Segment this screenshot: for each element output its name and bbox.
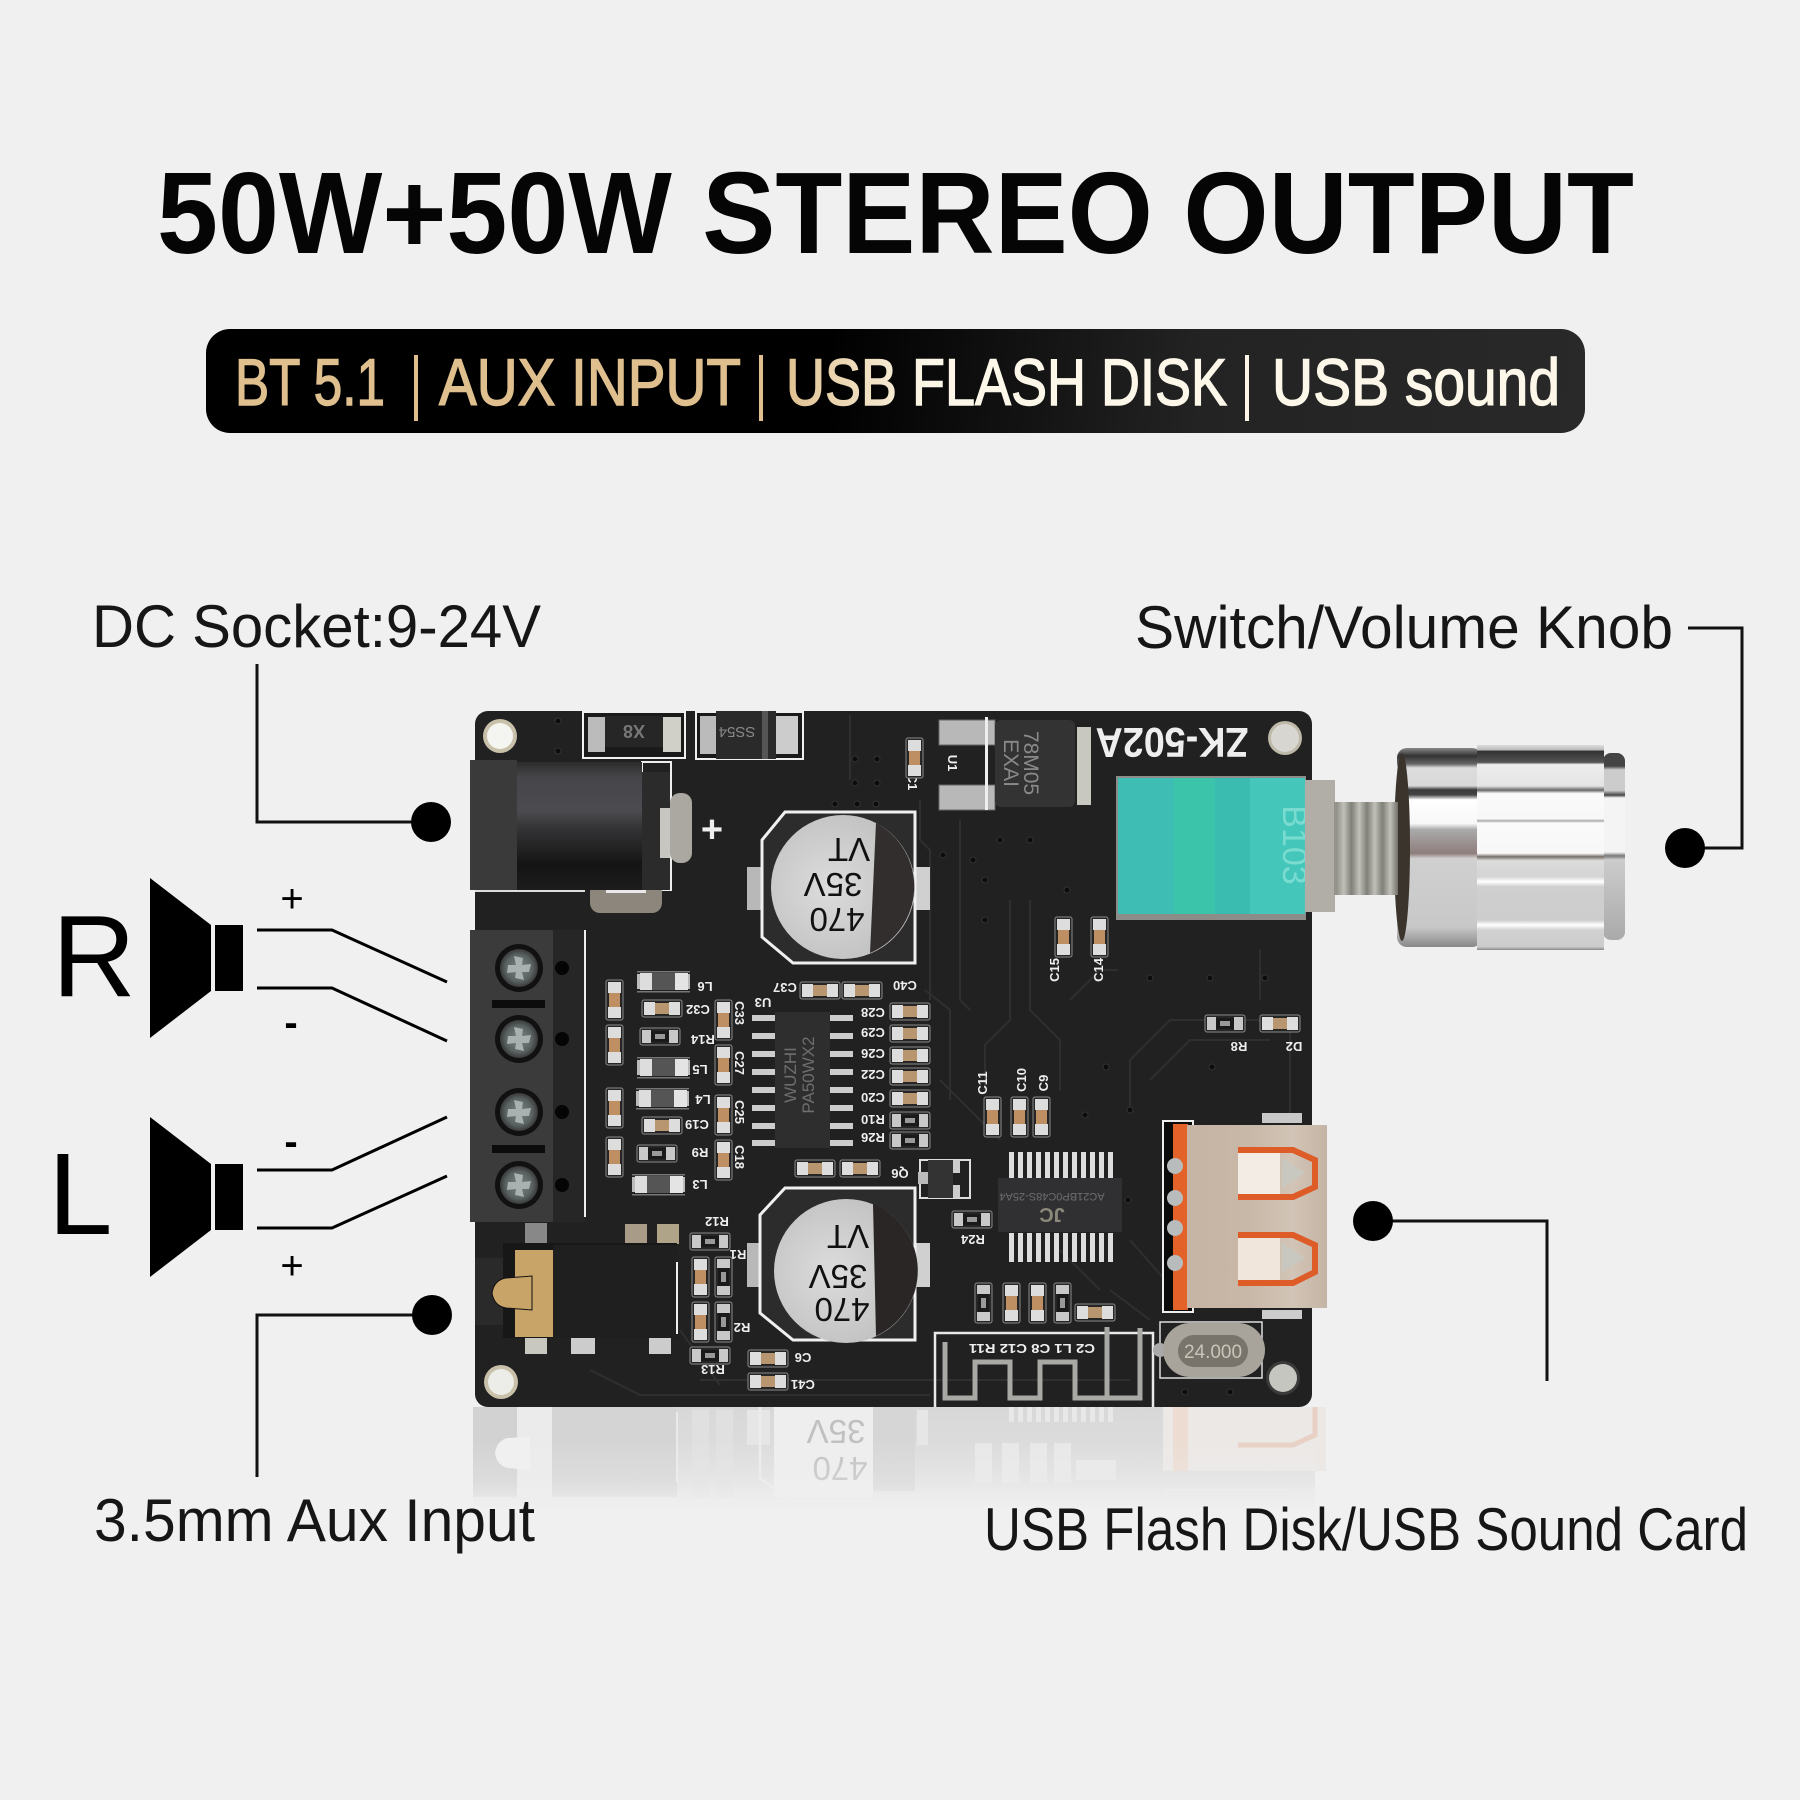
silkscreen labels: D2 — [1286, 1039, 1302, 1054]
silkscreen labels: C18 — [732, 1145, 747, 1169]
electrolytic capacitor bottom — [747, 1188, 930, 1343]
callout: USB port — [1353, 1201, 1547, 1381]
mounting holes — [483, 719, 1302, 1399]
electrolytic capacitor bottom: VT — [827, 1218, 869, 1255]
label: DC socket: DC Socket:9-24V — [92, 593, 541, 660]
silkscreen labels: C1 — [905, 774, 920, 790]
amplifier chip PA50WX2: WUZHI — [781, 1047, 800, 1103]
electrolytic capacitor top: 470 — [809, 901, 865, 938]
silkscreen labels: C41 — [791, 1377, 815, 1392]
board reflection — [473, 1407, 1326, 1512]
silkscreen labels: R24 — [960, 1232, 985, 1247]
silkscreen labels: C15 — [1047, 958, 1062, 982]
feature pill banner: USB sound — [1272, 345, 1560, 419]
right channel speaker — [52, 877, 447, 1045]
amplifier chip PA50WX2: PA50WX2 — [799, 1036, 818, 1114]
silkscreen labels: C26 — [861, 1046, 885, 1061]
vias — [555, 718, 1268, 1395]
silkscreen labels: C22 — [861, 1067, 885, 1082]
callout: aux input — [257, 1295, 452, 1477]
silkscreen labels: R9 — [692, 1145, 708, 1160]
amplifier chip PA50WX2 — [752, 1012, 853, 1148]
label: aux: 3.5mm Aux Input — [94, 1487, 535, 1554]
copper traces — [590, 715, 1290, 1395]
callout: DC socket — [257, 664, 451, 842]
title: 50W+50W STEREO OUTPUT — [157, 148, 1634, 278]
silkscreen labels: C19 — [685, 1117, 709, 1132]
diode SMD 1 — [583, 712, 685, 758]
silkscreen labels: C25 — [732, 1100, 747, 1124]
silkscreen labels: C2 L1 C8 C12 R11 — [969, 1341, 1095, 1356]
screw terminal block — [470, 930, 586, 1222]
audio decoder chip: JC — [1039, 1203, 1065, 1225]
silkscreen labels: C20 — [861, 1090, 885, 1105]
silkscreen labels: C37 — [773, 980, 797, 995]
silkscreen labels: R26 — [861, 1130, 885, 1145]
potentiometer — [1116, 776, 1335, 920]
silkscreen labels: R13 — [701, 1362, 725, 1377]
silkscreen labels: R2 — [734, 1320, 750, 1335]
diode SS54: SS54 — [719, 723, 755, 740]
silkscreen labels: L6 — [697, 979, 713, 994]
left channel speaker: L — [48, 1129, 113, 1259]
PCB antenna — [935, 1327, 1153, 1407]
feature pill banner: USB FLASH DISK — [786, 345, 1227, 419]
left channel speaker — [48, 1117, 447, 1288]
diode SS54 — [696, 711, 803, 759]
silkscreen labels: R14 — [690, 1032, 715, 1047]
label: switch volume knob: Switch/Volume Knob — [1135, 594, 1673, 661]
electrolytic capacitor top — [747, 812, 930, 963]
silkscreen labels: R12 — [705, 1214, 729, 1229]
3.5mm aux jack — [475, 1223, 679, 1354]
electrolytic capacitor top: 35V — [804, 866, 862, 903]
silkscreen labels: L5 — [692, 1062, 708, 1077]
silkscreen labels: R8 — [1231, 1039, 1247, 1054]
silkscreen labels: U3 — [755, 995, 771, 1010]
right channel speaker: R — [52, 891, 136, 1021]
volume knob — [1334, 745, 1625, 950]
audio decoder chip: AC21BP0C48S-25A4 — [999, 1190, 1105, 1202]
right channel speaker: - — [284, 1001, 298, 1045]
model label: ZK-502A — [1096, 719, 1248, 766]
electrolytic capacitor top: VT — [828, 831, 870, 868]
silkscreen labels: U1 — [945, 755, 960, 771]
silkscreen labels: C14 — [1091, 957, 1106, 982]
plus silk mark: + — [701, 809, 723, 851]
crystal oscillator: 24.000 — [1184, 1342, 1242, 1363]
silkscreen labels: R10 — [861, 1112, 885, 1127]
feature pill banner — [206, 329, 1585, 433]
silkscreen labels — [685, 755, 1302, 1392]
silkscreen labels: C10 — [1014, 1068, 1029, 1092]
USB port — [1163, 1113, 1327, 1319]
silkscreen labels: C29 — [861, 1025, 885, 1040]
silkscreen labels: C9 — [1036, 1075, 1051, 1091]
DC power socket — [470, 760, 692, 913]
electrolytic capacitor bottom: 470 — [814, 1291, 870, 1328]
regulator 78M05 — [939, 717, 1091, 810]
board reflection: 35V — [807, 1413, 865, 1450]
potentiometer: B103 — [1275, 805, 1313, 885]
transistor Q6 — [918, 1160, 970, 1198]
silkscreen labels: C32 — [686, 1002, 710, 1017]
amplifier circuit board — [470, 711, 1335, 1407]
left channel speaker: + — [280, 1244, 304, 1288]
callout: volume knob — [1665, 628, 1742, 868]
crystal oscillator — [1153, 1322, 1265, 1378]
board reflection: 470 — [812, 1450, 868, 1487]
silkscreen labels: C40 — [893, 978, 917, 993]
right channel speaker: + — [280, 877, 304, 921]
SMD inductors, resistors and capacitors — [606, 738, 1300, 1390]
silkscreen labels: Q6 — [891, 1166, 909, 1181]
silkscreen labels: C33 — [732, 1001, 747, 1025]
silkscreen labels: L4 — [695, 1092, 711, 1107]
silkscreen labels: C11 — [975, 1071, 990, 1095]
silkscreen labels: C27 — [732, 1051, 747, 1075]
silkscreen labels: R1 — [730, 1247, 746, 1262]
silkscreen labels: C28 — [861, 1005, 885, 1020]
silkscreen labels: L3 — [692, 1177, 708, 1192]
electrolytic capacitor bottom: 35V — [809, 1258, 867, 1295]
feature pill banner: BT 5.1 — [235, 345, 385, 419]
left channel speaker: - — [284, 1120, 298, 1164]
diode SMD 1: X8 — [623, 721, 645, 741]
silkscreen labels: C6 — [795, 1350, 811, 1365]
audio decoder chip — [998, 1152, 1122, 1262]
regulator 78M05: EXAI — [999, 739, 1022, 787]
regulator 78M05: 78M05 — [1019, 731, 1042, 795]
feature pill banner: AUX INPUT — [439, 345, 741, 419]
